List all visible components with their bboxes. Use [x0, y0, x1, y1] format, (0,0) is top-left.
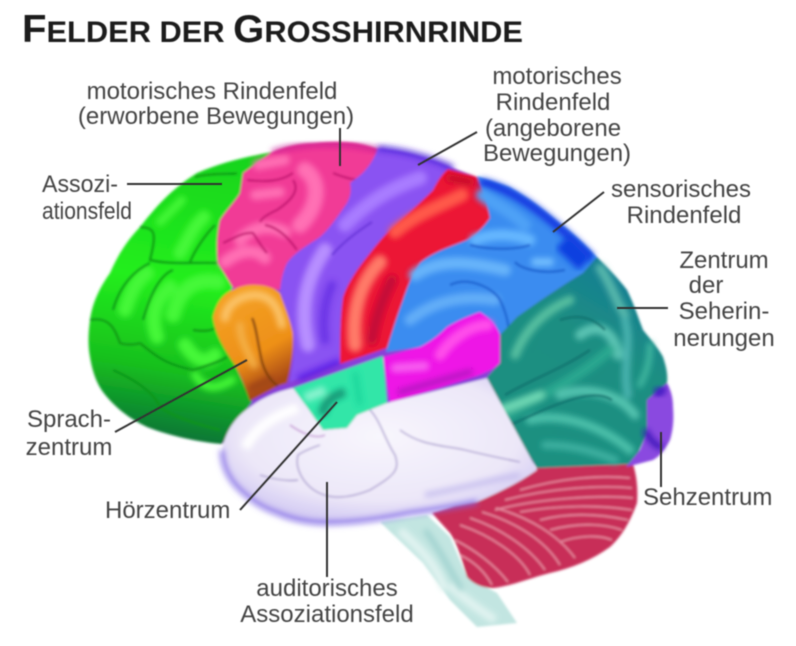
- sensory field, blue: [386, 176, 597, 352]
- label: visual memory center: Zentrum: [679, 247, 769, 274]
- label: visual memory center: Seherin-: [679, 298, 769, 325]
- label: speech center: Sprach-: [27, 406, 111, 433]
- label: visual center: Sehzentrum: [643, 484, 772, 511]
- brain base silhouette: [90, 144, 667, 468]
- label: visual memory center: der: [689, 272, 723, 299]
- label: speech center: zentrum: [26, 434, 112, 461]
- brainstem: [380, 515, 517, 627]
- label: motor field innate: (angeborene: [485, 115, 621, 142]
- frontal association field, green: [88, 152, 272, 444]
- label: motor field innate: Rindenfeld: [496, 89, 610, 116]
- brain illustration: [88, 142, 673, 627]
- leader lines: [115, 128, 668, 577]
- label: motor field innate: Bewegungen): [483, 140, 631, 167]
- label: auditory center: Hörzentrum: [105, 497, 230, 524]
- speech center, orange: [213, 285, 293, 401]
- magenta field: [383, 312, 500, 402]
- visual center, purple: [626, 383, 673, 467]
- label: association field: [42, 171, 132, 225]
- label: association field: ationsfeld: [42, 198, 132, 225]
- label: association field: Assozi-: [42, 171, 118, 198]
- label: sensory field: Rindenfeld: [627, 202, 741, 229]
- label: sensory field: sensorisches: [611, 176, 751, 203]
- motor field acquired, pink: [217, 142, 382, 290]
- auditory association field, white-lilac: [222, 378, 537, 523]
- visual memory center, teal: [487, 257, 667, 468]
- label: motor field acquired: (erworbene Bewegungen): [78, 103, 354, 130]
- label: auditory association field: Assoziationsfeld: [240, 601, 414, 628]
- motor field innate, purple: [280, 148, 453, 382]
- label: auditory association field: auditorisches: [256, 575, 398, 602]
- title: FELDER DER GROSSHIRNRINDE: [22, 8, 523, 51]
- label: visual memory center: nerungen: [673, 325, 775, 352]
- premotor field, red: [340, 169, 490, 364]
- cerebellum: [432, 464, 637, 588]
- label: motor field acquired: motorisches Rindenfeld: [87, 78, 337, 105]
- auditory center, mint: [293, 356, 387, 430]
- label: motor field innate: motorisches: [492, 63, 622, 90]
